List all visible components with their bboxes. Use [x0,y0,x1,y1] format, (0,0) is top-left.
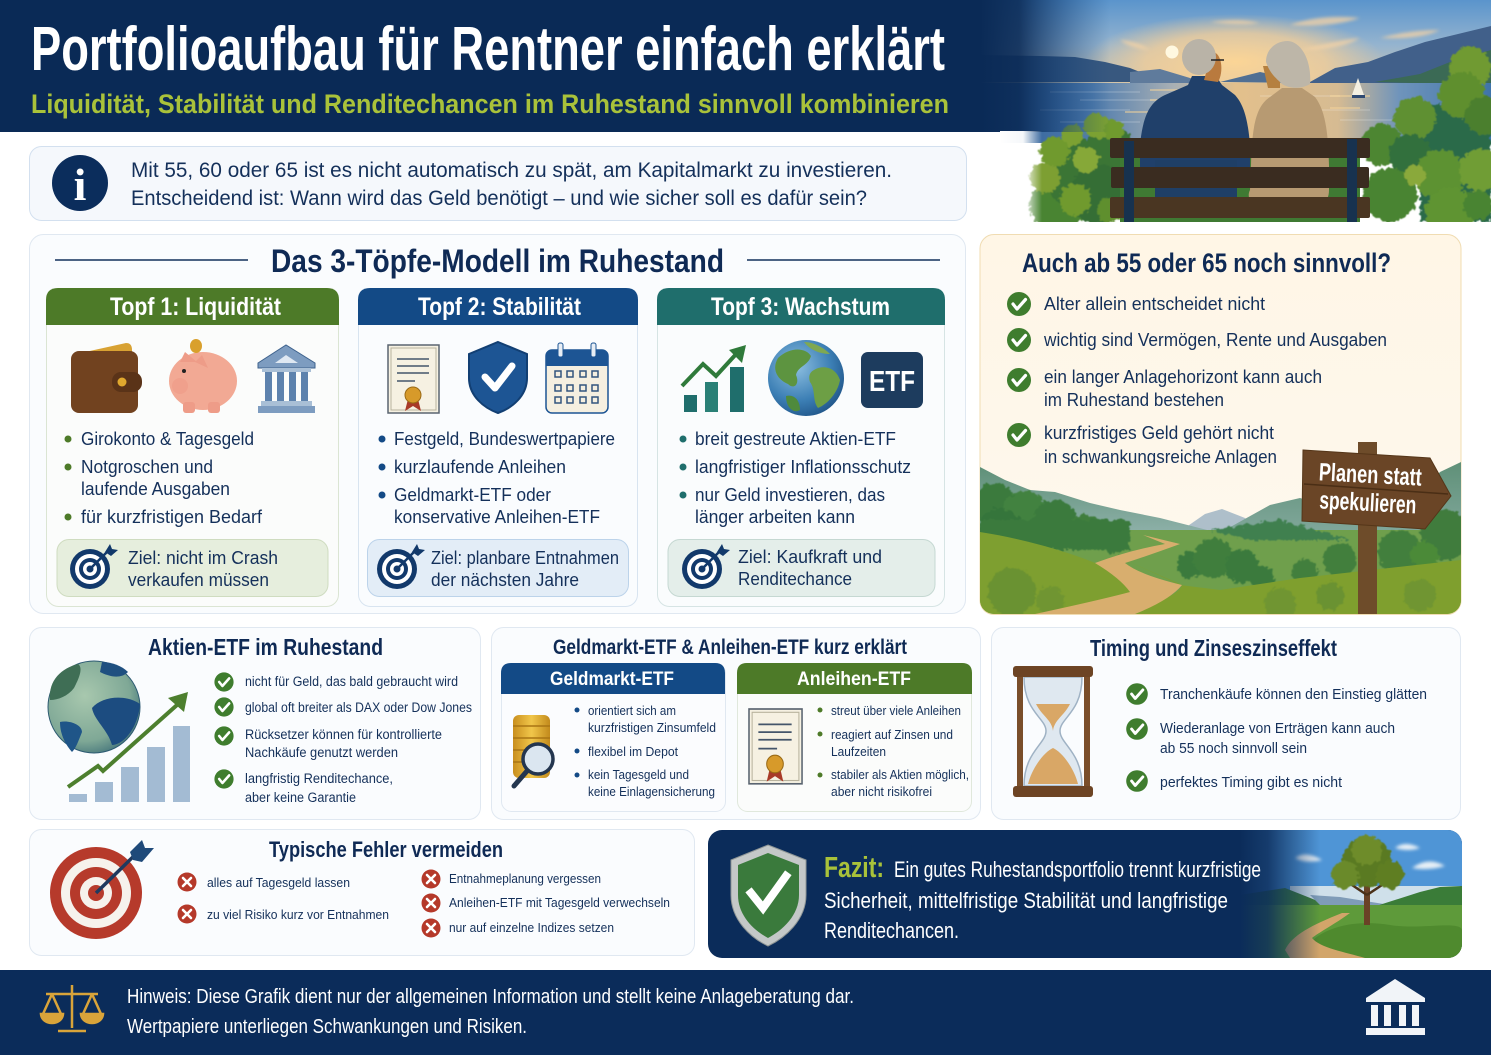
checklist: in schwankungsreiche Anlagen [1044,446,1277,467]
icon: certificate [749,709,802,784]
heading: Geldmarkt und Anleihen: Geldmarkt-ETF & Anleihen-ETF kurz erklärt [553,636,907,659]
panel: Fazit [708,830,1462,958]
list: Geldmarkt-ETF: flexibel im Depot [588,745,679,759]
checklist: Aktien-ETF: aber keine Garantie [245,790,356,805]
card header: Topf 2 [358,288,638,325]
list: Topf 2: Geldmarkt-ETF oder [394,485,551,505]
list: Topf 1: für kurzfristigen Bedarf [81,507,263,527]
card header: Anleihen-ETF: Anleihen-ETF [797,669,911,690]
list: Topf 2: Festgeld, Bundeswertpapiere [394,429,615,449]
icon: wallet [71,343,142,413]
landscape with tree [1240,830,1462,958]
list: Topf 1: laufende Ausgaben [81,479,230,499]
list: Topf 1: Notgroschen und [81,457,213,477]
checklist: Timing: ab 55 noch sinnvoll sein [1160,740,1307,757]
checklist: Aktien-ETF: langfristig Renditechance, [245,771,393,786]
list: Topf 3: länger arbeiten kann [695,507,855,527]
panel: Auch ab 55 oder 65 noch sinnvoll [973,234,1470,620]
icon: certificate [388,345,439,413]
checklist: kurzfristiges Geld gehört nicht [1044,422,1274,443]
icon: ETF badge [861,352,923,408]
goal box: Topf 1: Ziel: nicht im Crash [128,548,278,568]
card header: Anleihen-ETF [737,663,972,694]
list: Topf 3: langfristiger Inflationsschutz [695,457,911,477]
icon: info [52,155,108,211]
list: Topf 1 [64,429,263,527]
signpost [1302,442,1451,614]
panel: Timing und Zinseszinseffekt [992,628,1460,820]
list: Topf 1: Girokonto & Tagesgeld [81,429,254,449]
heading: sinnvoll: Auch ab 55 oder 65 noch sinnvoll? [1022,248,1391,278]
checklist: Aktien-ETF [214,672,472,805]
card: Topf 1 [46,288,339,606]
list: Anleihen-ETF: Laufzeiten [831,745,886,759]
icon: globe with rising chart [48,661,190,802]
goal box: Topf 1 [57,540,328,596]
icon: globe [768,340,844,416]
icon: calendar [546,343,608,413]
goal box: Topf 2: der nächsten Jahre [431,570,579,590]
panel: Aktien-ETF im Ruhestand [30,628,480,820]
list: Geldmarkt-ETF: kurzfristigen Zinsumfeld [588,721,716,735]
intro text: Mit 55, 60 oder 65 ist es nicht automatisch zu spät, am Kapitalmarkt zu investieren. [131,159,892,182]
footer band [0,970,1491,1055]
checklist: im Ruhestand bestehen [1044,389,1224,410]
goal box: Topf 2: Ziel: planbare Entnahmen [431,548,619,568]
goal box: Topf 2 [368,540,628,596]
icon: shield check [731,845,806,946]
icon: bank [258,345,315,413]
conclusion text: Fazit: [824,852,884,884]
checklist: Timing: perfektes Timing gibt es nicht [1160,774,1343,791]
disclaimer text: Hinweis: Diese Grafik dient nur der allgemeinen Information und stellt keine Anlageberatung dar. [127,986,854,1008]
card header: Topf 1: Topf 1: Liquidität [110,293,282,321]
list: errors: nur auf einzelne Indizes setzen [449,920,614,935]
icon: target with arrow [50,840,154,939]
heading: Timing: Timing und Zinseszinseffekt [1090,635,1337,661]
card: Geldmarkt-ETF [501,663,726,812]
goal box: Topf 1: verkaufen müssen [128,570,269,590]
icon: hourglass [1013,666,1093,797]
list: Topf 3: nur Geld investieren, das [695,485,885,505]
goal box: Topf 3 [668,540,935,596]
checklist: Aktien-ETF: Nachkäufe genutzt werden [245,745,398,760]
checklist: Timing: Wiederanlage von Erträgen kann auch [1160,720,1395,737]
icon: ETF badge: ETF [869,366,915,398]
list: Anleihen-ETF: stabiler als Aktien möglich, [831,768,969,782]
goal box: Topf 3: Ziel: Kaufkraft und [738,547,882,567]
checklist: Aktien-ETF: global oft breiter als DAX oder Dow Jones [245,700,472,715]
list: Anleihen-ETF: streut über viele Anleihen [831,704,961,718]
signpost: spekulieren [1319,486,1417,519]
icon: bank white [1366,979,1425,1035]
card: Anleihen-ETF [737,663,972,812]
heading: 3-Töpfe-Modell: Das 3-Töpfe-Modell im Ruhestand [271,243,724,279]
card: Topf 3 [657,288,945,606]
checklist: Aktien-ETF: nicht für Geld, das bald gebraucht wird [245,674,458,689]
signpost: Planen statt [1318,458,1423,492]
list: errors [178,870,670,938]
icon: scales [41,985,103,1031]
checklist: Timing [1126,683,1427,792]
list: Topf 2: konservative Anleihen-ETF [394,507,600,527]
title: Portfolioaufbau für Rentner einfach erklärt [31,15,945,84]
goal box: Topf 3: Renditechance [738,569,852,589]
card header: Topf 2: Topf 2: Stabilität [418,293,582,321]
woman [1249,41,1329,207]
list: Topf 3 [680,429,911,527]
icon: coins and magnifier [513,715,553,786]
intro text [131,159,892,210]
heading: Fehler: Typische Fehler vermeiden [269,837,503,862]
card header: Topf 3 [657,288,945,325]
list: Topf 3: breit gestreute Aktien-ETF [695,429,896,449]
panel: Typische Fehler vermeiden [30,830,694,956]
conclusion text: Sicherheit, mittelfristige Stabilität und langfristige [824,888,1228,913]
list: Topf 2: kurzlaufende Anleihen [394,457,566,477]
list: errors: alles auf Tagesgeld lassen [207,875,350,890]
disclaimer text [127,986,854,1038]
header band [0,0,1040,132]
info box [30,146,966,220]
intro text: Entscheidend ist: Wann wird das Geld benötigt – und wie sicher soll es dafür sein? [131,187,867,210]
card: Topf 2 [358,288,638,606]
list: Geldmarkt-ETF [574,704,716,799]
landscape with signpost [973,442,1470,620]
checklist [1007,292,1387,467]
list: Topf 2 [378,429,615,527]
conclusion text: Ein gutes Ruhestandsportfolio trennt kurzfristige [894,857,1261,882]
icon: piggy bank [169,339,237,413]
checklist: Alter allein entscheidet nicht [1044,293,1265,314]
list: errors: zu viel Risiko kurz vor Entnahmen [207,907,389,922]
list: Anleihen-ETF: reagiert auf Zinsen und [831,728,953,742]
list: Geldmarkt-ETF: orientiert sich am [588,704,676,718]
left bush [1030,113,1134,233]
icon: shield [469,342,527,413]
bench [1110,138,1370,222]
subtitle: Liquidität, Stabilität und Renditechancen im Ruhestand sinnvoll kombinieren [31,89,949,119]
checklist: ein langer Anlagehorizont kann auch [1044,366,1322,387]
panel: 3-Töpfe-Modell [30,234,966,614]
card header: Topf 1 [46,288,339,325]
list: Anleihen-ETF [818,704,969,799]
list: Anleihen-ETF: aber nicht risikofrei [831,785,932,799]
list: errors: Entnahmeplanung vergessen [449,871,601,886]
checklist: Timing: Tranchenkäufe können den Einstieg glätten [1160,686,1427,703]
right bushes [1361,47,1491,237]
hero image: couple on bench at lake [980,0,1491,237]
card header: Geldmarkt-ETF: Geldmarkt-ETF [550,669,674,690]
list: Geldmarkt-ETF: kein Tagesgeld und [588,768,689,782]
checklist: Aktien-ETF: Rücksetzer können für kontrollierte [245,727,442,742]
man [1140,39,1250,210]
list: errors: Anleihen-ETF mit Tagesgeld verwechseln [449,895,670,910]
icon: growth chart [682,345,746,412]
conclusion text: Renditechancen. [824,918,959,943]
list: Geldmarkt-ETF: keine Einlagensicherung [588,785,715,799]
icon: info: i [74,159,87,210]
checklist: wichtig sind Vermögen, Rente und Ausgaben [1043,329,1387,350]
disclaimer text: Wertpapiere unterliegen Schwankungen und Risiken. [127,1016,527,1038]
heading: Aktien-ETF: Aktien-ETF im Ruhestand [148,634,383,660]
card header: Geldmarkt-ETF [501,663,725,694]
card header: Topf 3: Topf 3: Wachstum [711,293,890,321]
conclusion text [824,856,1260,938]
panel: Geldmarkt-ETF und Anleihen-ETF [492,628,980,820]
